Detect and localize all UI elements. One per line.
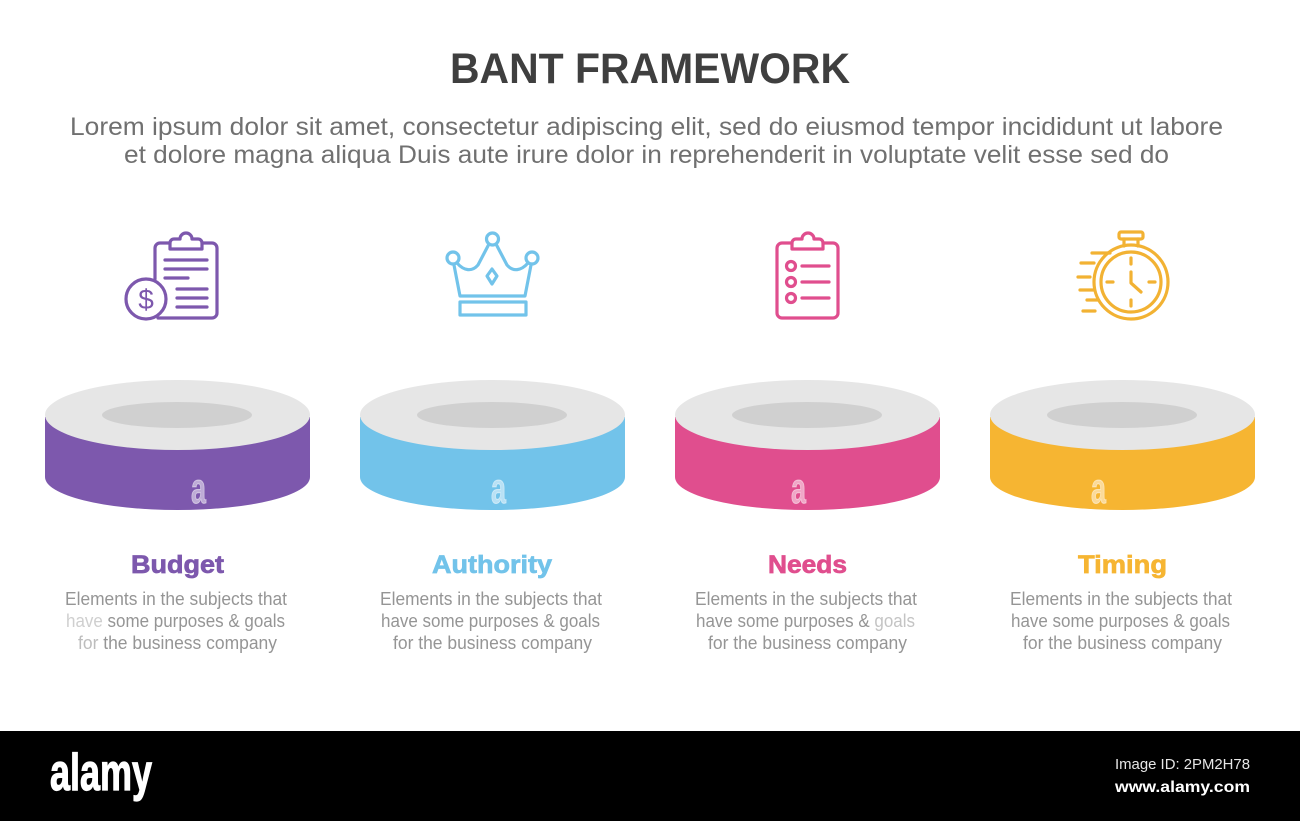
footer image id and url: www.alamy.com: [1114, 779, 1250, 796]
subtitle text block: Lorem ipsum dolor sit amet, consectetur adipiscing elit, sed do eiusmod tempor incididunt ut labore: [70, 113, 1223, 141]
panel: needs disc: [675, 380, 940, 513]
footer: watermark bar: [0, 731, 1300, 821]
text block: budget description: for the business company: [78, 633, 277, 653]
text block: budget description: Elements in the subjects that: [65, 589, 287, 609]
panel: authority disc: a: [491, 465, 507, 513]
text block: authority description: Elements in the subjects that: [380, 589, 602, 609]
icon: budget clipboard with dollar coin: [126, 233, 217, 319]
text block: needs description: Elements in the subjects that: [695, 589, 917, 609]
heading: budget: Budget: [131, 551, 225, 579]
text block: timing description: for the business company: [1023, 633, 1222, 653]
text block: authority description: for the business company: [393, 633, 592, 653]
text block: authority description: [380, 589, 602, 653]
heading: authority: Authority: [432, 551, 552, 579]
text block: needs description: have some purposes & goals: [696, 611, 915, 631]
panel: timing disc: [990, 380, 1255, 513]
title: BANT FRAMEWORK: [450, 45, 850, 93]
icon: budget clipboard with dollar coin: $: [138, 284, 154, 315]
text block: authority description: have some purposes & goals: [381, 611, 600, 631]
heading: timing: Timing: [1078, 551, 1167, 579]
subtitle text block: [70, 113, 1223, 169]
text block: timing description: [1010, 589, 1232, 653]
panel: budget disc: a: [191, 465, 207, 513]
subtitle text block: et dolore magna aliqua Duis aute irure dolor in reprehenderit in voluptate velit esse sed do: [124, 141, 1169, 169]
text block: timing description: Elements in the subjects that: [1010, 589, 1232, 609]
footer image id and url: [1114, 756, 1250, 796]
text block: needs description: [695, 589, 917, 653]
text block: budget description: have some purposes & goals: [66, 611, 285, 631]
panel: authority disc: [360, 380, 625, 513]
text block: timing description: have some purposes & goals: [1011, 611, 1230, 631]
footer logo: alamy: [50, 744, 152, 802]
panel: budget disc: [45, 380, 310, 513]
panel: needs disc: a: [791, 465, 807, 513]
icon: authority crown: [447, 233, 538, 315]
panel: timing disc: a: [1091, 465, 1107, 513]
icon: timing stopwatch: [1078, 232, 1168, 319]
footer image id and url: Image ID: 2PM2H78: [1115, 756, 1250, 773]
icon: needs checklist clipboard: [777, 233, 838, 318]
text block: needs description: for the business company: [708, 633, 907, 653]
text block: budget description: [65, 589, 287, 653]
heading: needs: Needs: [768, 551, 847, 579]
